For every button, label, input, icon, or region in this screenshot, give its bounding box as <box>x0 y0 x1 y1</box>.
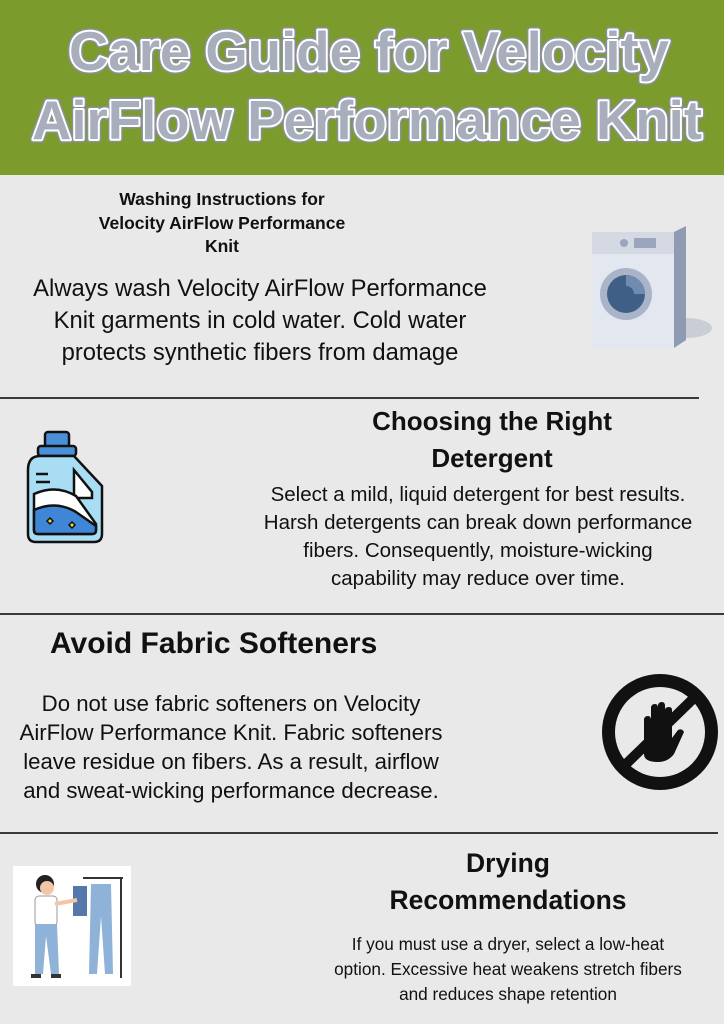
icon: washing machine <box>592 226 712 348</box>
title: AirFlow Performance Knit <box>32 89 702 151</box>
title <box>32 20 702 151</box>
title: AirFlow Performance Knit <box>32 89 702 151</box>
section 1 body: Always wash Velocity AirFlow Performance <box>33 275 487 302</box>
section 4 heading <box>389 848 627 915</box>
section 2 body: Select a mild, liquid detergent for best results. <box>271 483 685 506</box>
section 1 heading: Velocity AirFlow Performance <box>99 212 345 232</box>
title: Care Guide for Velocity <box>69 20 669 82</box>
section 1 heading: Knit <box>205 236 239 256</box>
section 2 heading: Choosing the Right <box>372 406 612 436</box>
title banner <box>0 0 724 175</box>
section 1 body <box>33 275 487 366</box>
section 2 heading: Detergent <box>431 443 553 473</box>
section 3 body <box>20 691 442 803</box>
section 1 body: protects synthetic fibers from damage <box>62 339 458 366</box>
section 3 body: AirFlow Performance Knit. Fabric softeners <box>20 720 442 745</box>
section 3 body: Do not use fabric softeners on Velocity <box>42 691 420 716</box>
section 4 body: If you must use a dryer, select a low-heat <box>352 934 664 954</box>
image: person with clothes rack <box>13 866 131 986</box>
section 4 heading: Recommendations <box>389 885 627 915</box>
section 2 body <box>264 483 692 590</box>
title: Care Guide for Velocity <box>69 20 669 82</box>
section 1 heading <box>98 189 345 256</box>
section 4 heading: Drying <box>466 848 550 878</box>
section 4 body <box>334 934 682 1004</box>
section 4 body: and reduces shape retention <box>399 984 617 1004</box>
section 4 body: option. Excessive heat weakens stretch fibers <box>334 959 682 979</box>
icon: no hand <box>602 674 718 790</box>
section 1 body: Knit garments in cold water. Cold water <box>54 307 466 334</box>
section 3 body: leave residue on fibers. As a result, airflow <box>23 749 439 774</box>
title: Care Guide for Velocity <box>69 20 669 82</box>
section 2 heading <box>372 406 612 473</box>
section 2 body: capability may reduce over time. <box>331 567 625 590</box>
icon: detergent bottle <box>26 430 104 544</box>
section 1 heading: Washing Instructions for <box>119 189 325 209</box>
section 2 body: fibers. Consequently, moisture-wicking <box>303 539 653 562</box>
section 2 body: Harsh detergents can break down performance <box>264 511 692 534</box>
section 3 body: and sweat-wicking performance decrease. <box>23 778 439 803</box>
title: AirFlow Performance Knit <box>32 89 702 151</box>
section 3 heading: Avoid Fabric Softeners <box>50 627 377 660</box>
